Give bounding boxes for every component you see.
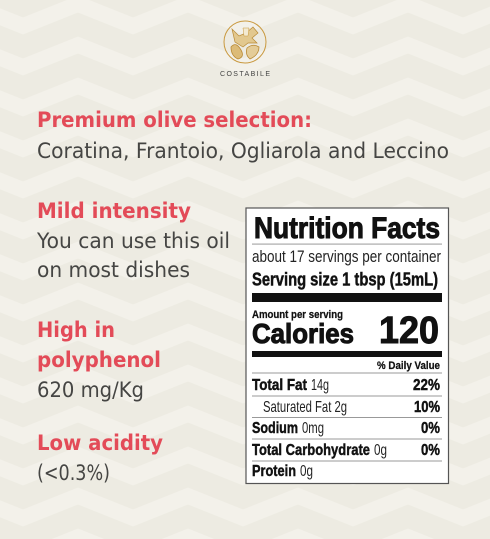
panel: nutrition facts [246, 208, 448, 484]
heading: Low acidity [37, 431, 163, 455]
heading: Premium olive selection: [37, 108, 312, 132]
row: sodium: 0mg [302, 420, 324, 437]
description line 2: on most dishes [37, 258, 190, 282]
text block: mild intensity [36, 199, 230, 282]
amount per serving: Amount per serving [252, 309, 343, 321]
value: 620 mg/Kg [37, 378, 144, 402]
row: protein: 0g [300, 463, 313, 480]
row: sodium [252, 420, 440, 437]
row: total carbohydrate: 0g [374, 442, 387, 459]
row: saturated fat: 10% [414, 399, 440, 416]
row: protein: Protein [252, 463, 296, 480]
description line 1: You can use this oil [36, 229, 230, 253]
row: total fat: 14g [311, 377, 329, 394]
row: total carbohydrate: 0% [421, 442, 440, 459]
heading line 1: High in [37, 318, 115, 342]
text block: high in polyphenol [37, 318, 161, 402]
row: total fat: Total Fat [252, 377, 308, 394]
heading: Mild intensity [37, 199, 191, 223]
row: total fat: 22% [413, 377, 440, 394]
logo: Costabile [220, 21, 270, 78]
row: sodium: Sodium [252, 420, 298, 437]
text block: premium olive selection [37, 108, 449, 163]
heading line 2: polyphenol [37, 348, 161, 372]
text block: low acidity [37, 431, 163, 485]
serving size: Serving size 1 tbsp (15mL) [252, 270, 438, 290]
row: sodium: 0% [421, 420, 440, 437]
title: Nutrition Facts [254, 212, 440, 245]
panel frame [246, 208, 448, 484]
varieties: Coratina, Frantoio, Ogliarola and Leccino [37, 139, 449, 163]
icon: gold circular emblem [224, 21, 266, 63]
row: saturated fat: Saturated Fat 2g [263, 399, 347, 416]
row: total fat [252, 377, 440, 394]
row: total carbohydrate: Total Carbohydrate [252, 442, 370, 459]
logo wordmark: COSTABILE [220, 71, 270, 78]
calories label: Calories [252, 318, 354, 349]
servings per container: about 17 servings per container [252, 247, 441, 266]
calories value: 120 [379, 310, 439, 352]
daily value header: % Daily Value [377, 360, 440, 372]
value: (<0.3%) [37, 461, 110, 485]
row: saturated fat [263, 399, 440, 416]
